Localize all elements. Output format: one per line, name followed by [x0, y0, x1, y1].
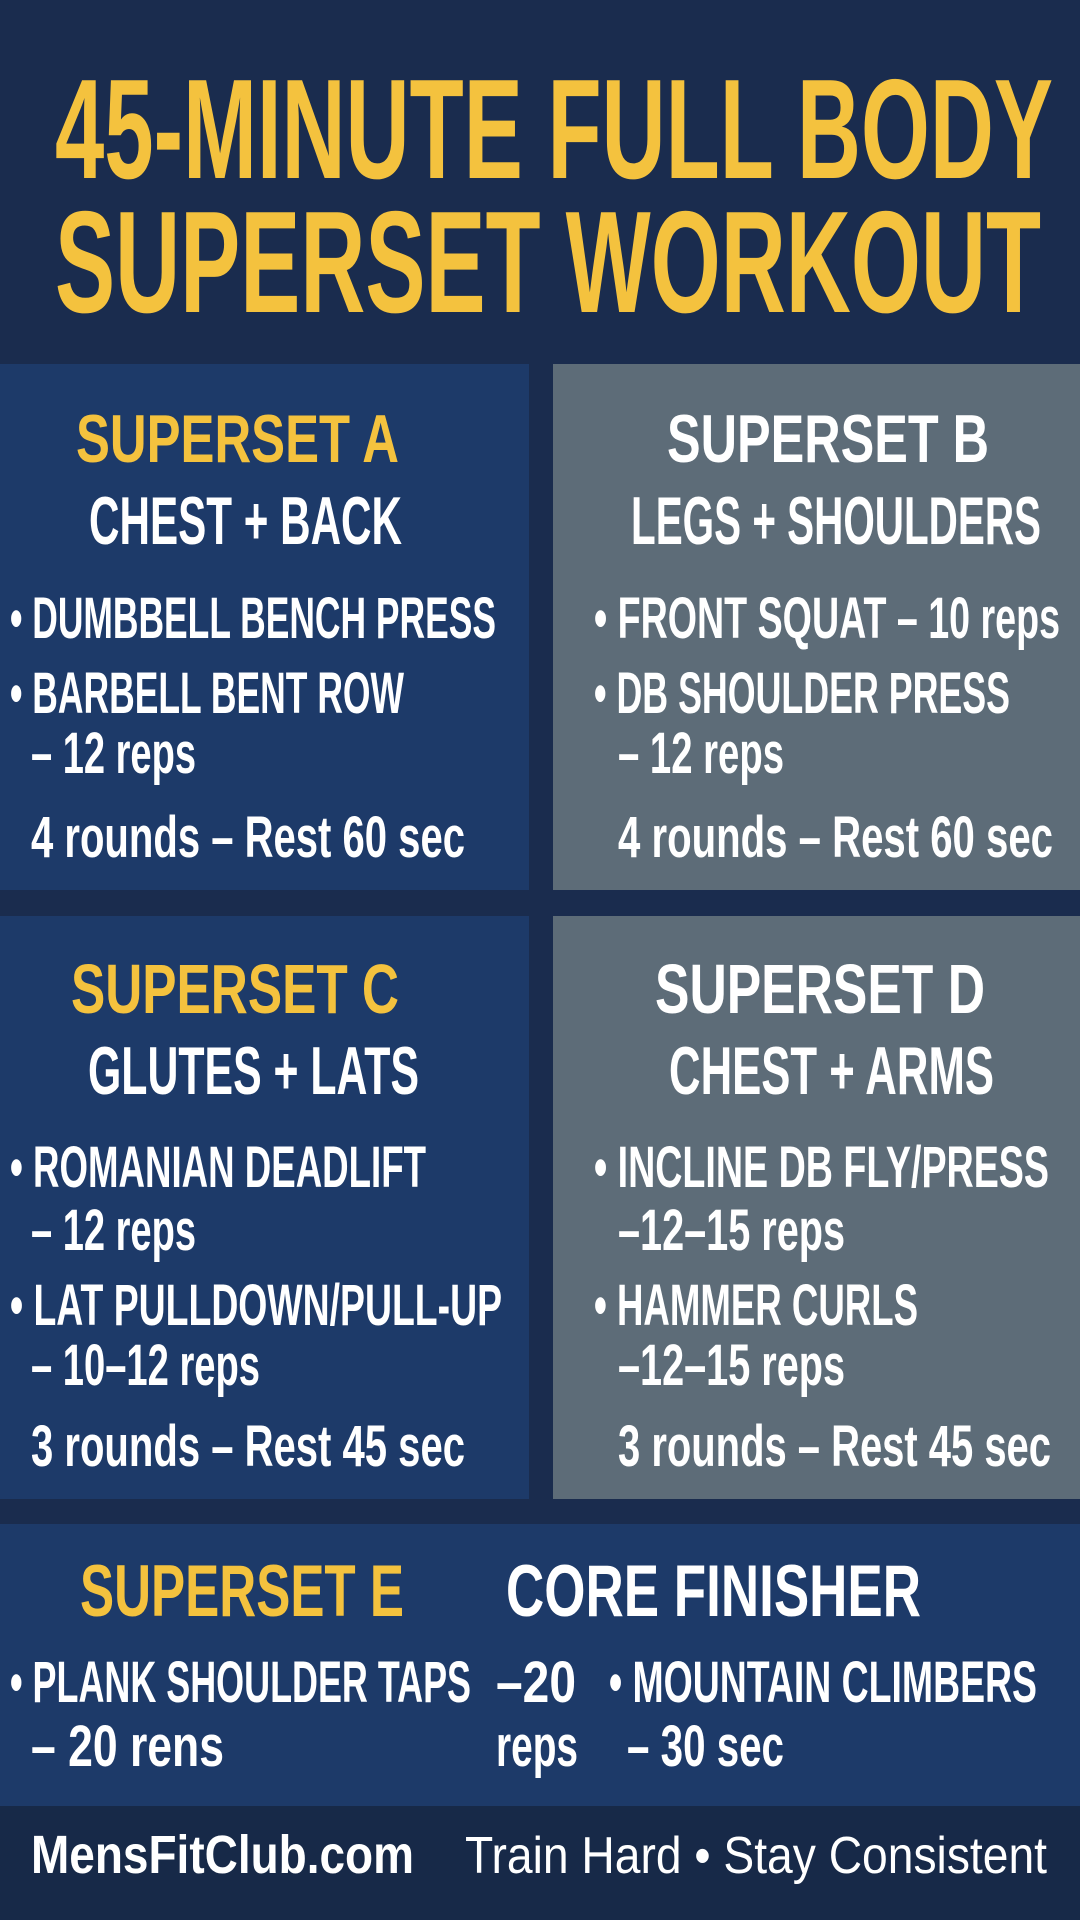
panel: superset E core finisher	[0, 1524, 1080, 1806]
exercise list C	[10, 1135, 502, 1398]
panel: superset A	[0, 364, 529, 890]
exercise list D	[594, 1135, 1049, 1398]
exercise list B	[594, 586, 1060, 786]
exercise list D: –12–15 reps	[618, 1333, 845, 1398]
subheading: glutes + lats: GLUTES + LATS	[88, 1033, 419, 1109]
exercise list A	[10, 586, 496, 786]
exercise list A: • DUMBBELL BENCH PRESS	[10, 586, 496, 651]
exercise list E: – 20 rens	[31, 1714, 224, 1779]
heading: superset E: SUPERSET E	[80, 1551, 404, 1632]
exercise list E: – 30 sec	[627, 1714, 784, 1779]
exercise list E: • PLANK SHOULDER TAPS	[10, 1650, 471, 1715]
heading: core finisher: CORE FINISHER	[506, 1551, 921, 1632]
panel: superset D	[553, 916, 1080, 1499]
rounds A: 4 rounds – Rest 60 sec	[31, 805, 465, 870]
exercise list A: – 12 reps	[31, 721, 196, 786]
exercise list B: – 12 reps	[618, 721, 784, 786]
exercise list D: –12–15 reps	[618, 1198, 845, 1263]
exercise list E	[10, 1650, 1037, 1779]
exercise list E: reps	[496, 1714, 578, 1779]
panel: superset C	[0, 916, 529, 1499]
subheading: chest + back: CHEST + BACK	[89, 483, 402, 559]
heading: superset C: SUPERSET C	[71, 950, 399, 1028]
rounds C: 3 rounds – Rest 45 sec	[31, 1414, 465, 1479]
exercise list C: – 12 reps	[31, 1198, 196, 1263]
footer	[0, 1806, 1080, 1920]
exercise list C: • LAT PULLDOWN/PULL-UP	[10, 1273, 502, 1338]
exercise list C: – 10–12 reps	[31, 1333, 260, 1398]
title	[55, 50, 1053, 343]
footer: site name: MensFitClub.com	[31, 1825, 414, 1885]
exercise list A: • BARBELL BENT ROW	[10, 661, 404, 726]
heading: superset A: SUPERSET A	[76, 401, 399, 477]
exercise list E: –20	[496, 1650, 576, 1715]
panel: superset B	[553, 364, 1080, 890]
exercise list C: • ROMANIAN DEADLIFT	[10, 1135, 426, 1200]
